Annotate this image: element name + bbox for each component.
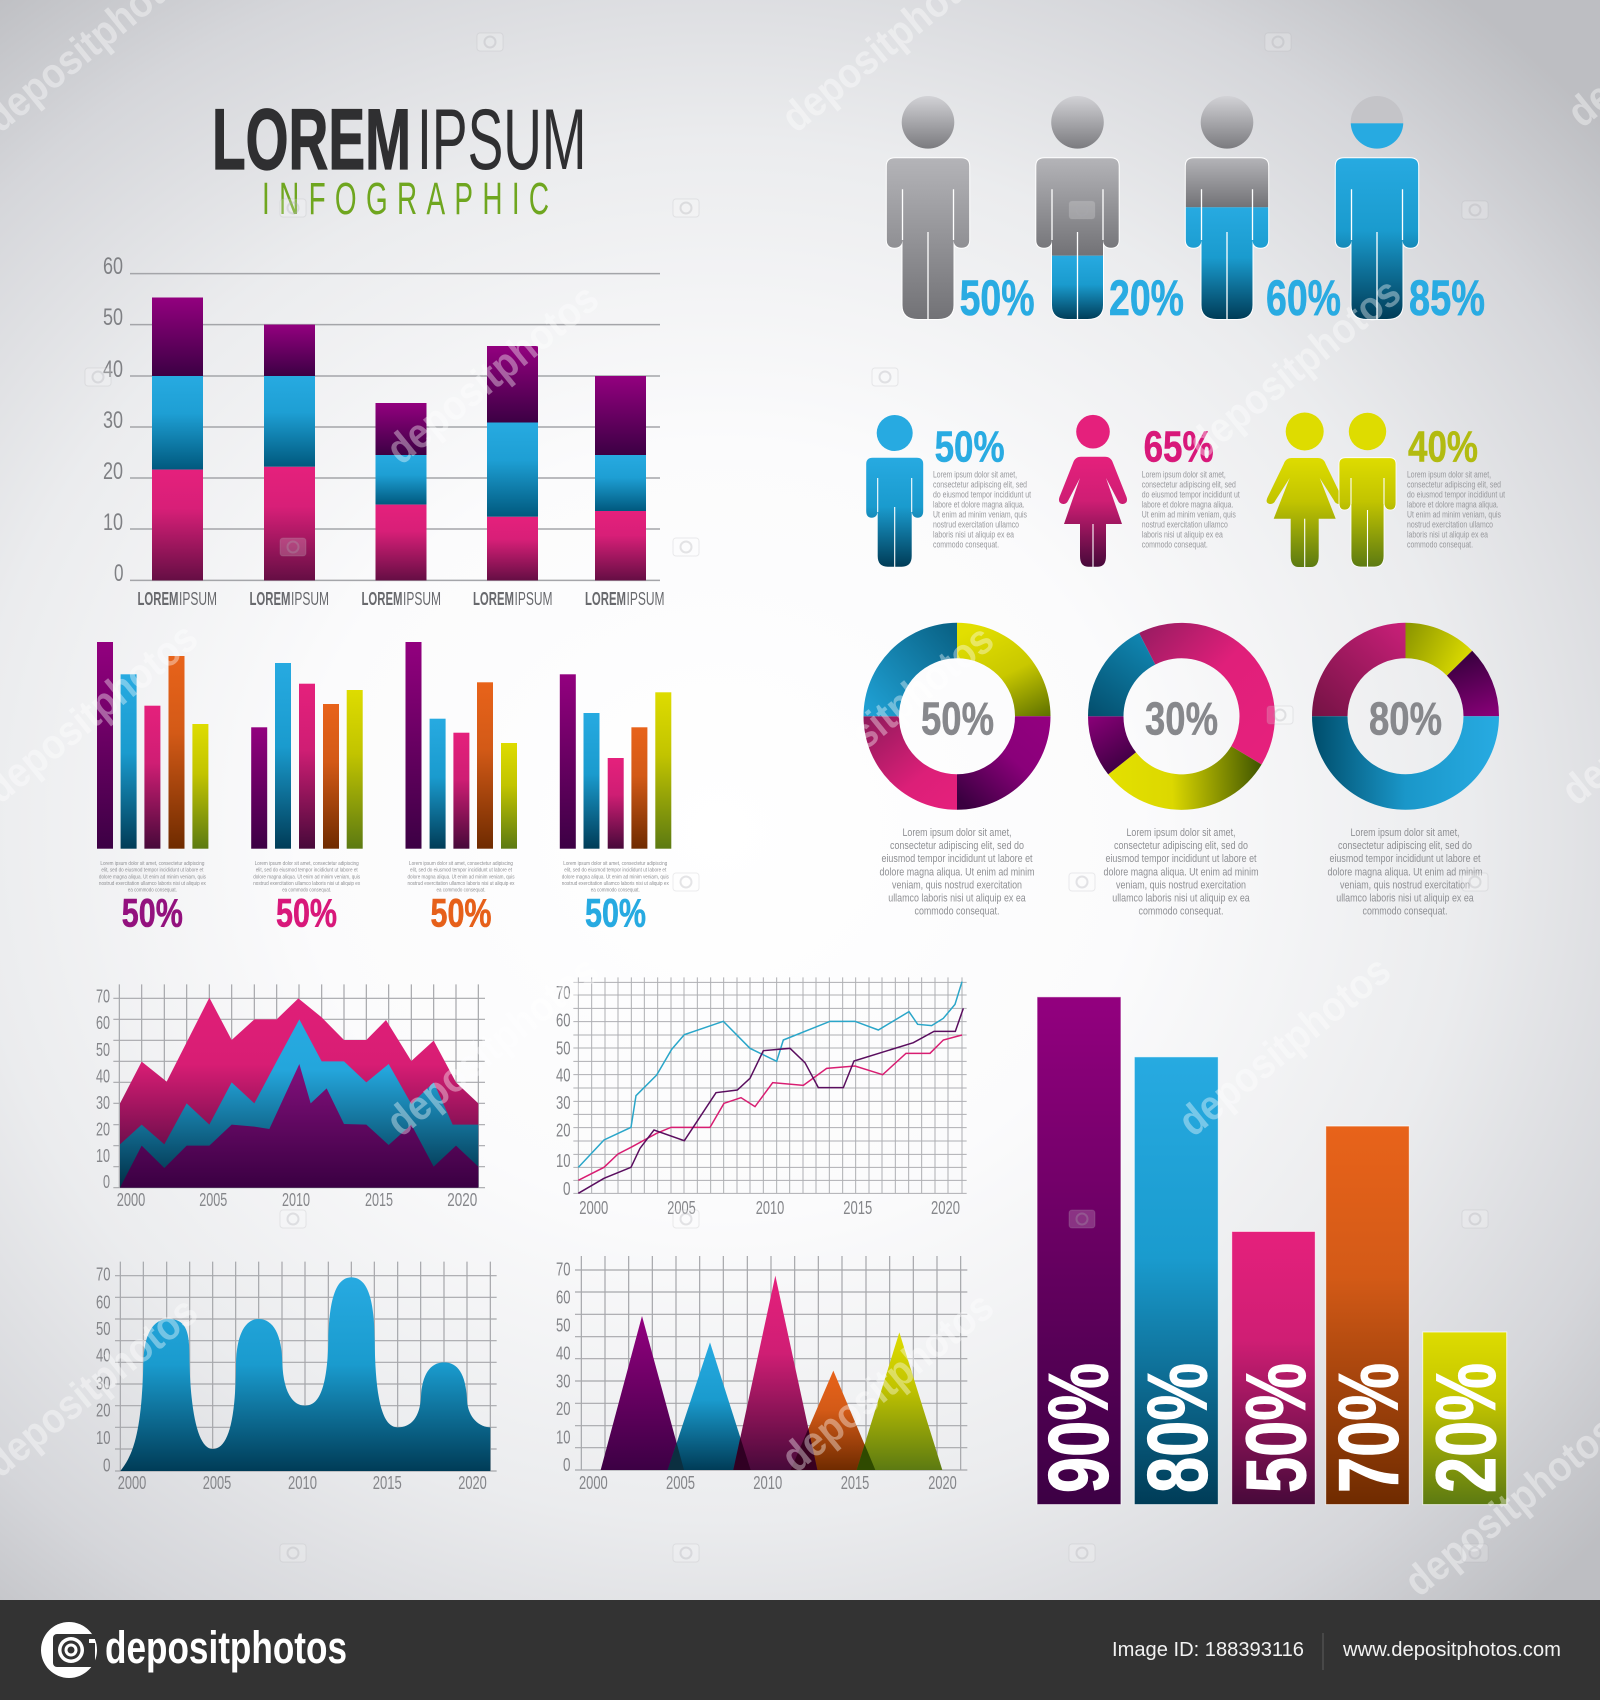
- series: pink: [578, 1035, 962, 1180]
- icon: person 85%: [1332, 96, 1422, 320]
- stacked bar chart: [103, 253, 664, 609]
- percentage: 50%: [430, 892, 492, 936]
- stat: 50%: 50%: [935, 423, 1005, 472]
- bar labels: IPSUM: [514, 589, 552, 609]
- axis labels: 2005: [667, 1198, 696, 1218]
- axis labels: 70: [556, 983, 570, 1003]
- axis labels: 60: [556, 1011, 570, 1031]
- axis labels: 60: [96, 1013, 110, 1033]
- caption: dolore magna aliqua. Ut enim ad minim veniam, quis: [253, 874, 360, 880]
- bar 90%: [1032, 997, 1126, 1505]
- donut caption 3: ullamco laboris nisi ut aliquip ex ea: [1336, 892, 1474, 904]
- percentage: 50%: [122, 892, 183, 936]
- triangle: purple: [601, 1316, 684, 1470]
- triangle overlaps: [668, 1429, 875, 1470]
- donut caption 2: commodo consequat.: [1138, 906, 1224, 918]
- axis labels: [556, 983, 960, 1218]
- caption: [562, 861, 669, 894]
- bar labels: LOREM: [585, 589, 626, 609]
- donut caption 1: ullamco laboris nisi ut aliquip ex ea: [888, 892, 1026, 904]
- axis labels: 40: [96, 1346, 110, 1366]
- donut caption 3: Lorem ipsum dolor sit amet,: [1350, 827, 1460, 839]
- description: laboris nisi ut aliquip ex ea: [1407, 529, 1488, 539]
- axis labels: 2010: [756, 1198, 784, 1218]
- donut caption 3: commodo consequat.: [1362, 906, 1448, 918]
- axis labels: 2000: [117, 1190, 145, 1210]
- bar labels: IPSUM: [403, 589, 441, 609]
- description: Lorem ipsum dolor sit amet,: [1142, 469, 1226, 479]
- layered area chart: [96, 984, 485, 1210]
- caption: [253, 861, 360, 894]
- caption: Lorem ipsum dolor sit amet, consectetur adipiscing: [563, 861, 667, 867]
- bar labels: LOREM: [362, 589, 402, 609]
- axis labels: 2000: [579, 1473, 608, 1493]
- description: Lorem ipsum dolor sit amet,: [1407, 469, 1491, 479]
- donut caption 3: consectetur adipiscing elit, sed do: [1338, 840, 1472, 852]
- icon: couple: [1267, 412, 1396, 567]
- axis labels: 50: [96, 1319, 110, 1339]
- axis labels: 2020: [447, 1190, 477, 1210]
- large percentage bar chart: [1032, 997, 1513, 1505]
- mini bar group 4: [560, 674, 671, 936]
- caption: [99, 861, 206, 894]
- watermark overlay: depositphotos: [377, 946, 607, 1145]
- title: LOREM: [212, 92, 411, 188]
- triangle: yellow: [857, 1332, 942, 1470]
- axis labels: 2005: [199, 1190, 227, 1210]
- stat: 40%: 40%: [1408, 423, 1478, 472]
- axis labels: 2005: [666, 1473, 695, 1493]
- description: commodo consequat.: [1407, 539, 1473, 549]
- smooth area chart: [96, 1262, 497, 1493]
- icon: camera logo: [41, 1622, 97, 1678]
- stat: 65%: 65%: [1144, 423, 1214, 472]
- donut caption 1: eiusmod tempor incididunt ut labore et: [882, 853, 1032, 865]
- axis labels: 2015: [843, 1198, 872, 1218]
- bar labels: IPSUM: [291, 589, 329, 609]
- bar labels: IPSUM: [179, 589, 217, 609]
- description: do eiusmod tempor incididunt ut: [1142, 489, 1240, 499]
- axis labels: 2015: [365, 1190, 393, 1210]
- description: consectetur adipiscing elit, sed: [1407, 479, 1501, 489]
- image id: Image ID: 188393116: [1112, 1639, 1304, 1661]
- stat: 50%: [933, 423, 1031, 549]
- axis labels: 20: [96, 1120, 110, 1140]
- bar 70%: 70%: [1322, 1363, 1416, 1493]
- person percentages: 20%: [1109, 270, 1184, 326]
- axis labels: 2015: [841, 1473, 869, 1493]
- y axis labels: 40: [103, 356, 123, 383]
- donut caption 3: veniam, quis nostrud exercitation: [1340, 879, 1470, 891]
- axis labels: 40: [556, 1066, 570, 1086]
- description: [1142, 469, 1240, 549]
- description: [933, 469, 1031, 549]
- description: nostrud exercitation ullamco: [1142, 519, 1228, 529]
- axis labels: [556, 1260, 957, 1493]
- bar 50%: 50%: [1229, 1363, 1323, 1493]
- icon: person 20%: [1032, 96, 1122, 320]
- donut caption 1: [880, 827, 1034, 918]
- stacked bar 5: [595, 376, 646, 580]
- caption: nostrud exercitation ullamco laboris nisi ut aliquip ex: [99, 881, 206, 887]
- y axis labels: 10: [103, 509, 123, 536]
- person percentages: 85%: [1409, 270, 1485, 326]
- donut caption 2: dolore magna aliqua. Ut enim ad minim: [1104, 866, 1258, 878]
- mini bar group 2: [251, 663, 363, 936]
- donut caption 2: Lorem ipsum dolor sit amet,: [1126, 827, 1236, 839]
- triangle: orange: [791, 1371, 875, 1470]
- caption: elit, sed do eiusmod tempor incididunt ut labore et: [564, 868, 667, 874]
- description: Ut enim ad minim veniam, quis: [933, 509, 1027, 519]
- triangle chart: [556, 1256, 967, 1493]
- icon: person 50%: [883, 96, 973, 320]
- description: commodo consequat.: [933, 539, 999, 549]
- person percentages: 60%: [1266, 270, 1341, 326]
- axis labels: 70: [96, 986, 110, 1006]
- caption: dolore magna aliqua. Ut enim ad minim veniam, quis: [562, 874, 669, 880]
- axis labels: 20: [556, 1399, 570, 1419]
- description: nostrud exercitation ullamco: [933, 519, 1019, 529]
- mini bar group 1: [97, 642, 208, 936]
- brand name: depositphotos: [105, 1622, 347, 1673]
- website: www.depositphotos.com: [1342, 1639, 1561, 1661]
- axis labels: 2015: [373, 1473, 402, 1493]
- axis labels: 2000: [579, 1198, 608, 1218]
- axis labels: 40: [556, 1343, 570, 1363]
- watermark overlay: depositphotos: [772, 615, 1002, 814]
- caption: ea commodo consequat.: [436, 888, 486, 894]
- axis labels: 50: [96, 1040, 110, 1060]
- series: blue: [578, 982, 962, 1167]
- triangle: blue: [668, 1342, 751, 1470]
- series: purple: [578, 1008, 963, 1193]
- axis labels: 2010: [282, 1190, 310, 1210]
- bar 90%: 90%: [1032, 1363, 1126, 1493]
- description: consectetur adipiscing elit, sed: [933, 479, 1027, 489]
- donut chart 50%: [864, 623, 1050, 810]
- mini bar group 3: [406, 642, 517, 936]
- caption: nostrud exercitation ullamco laboris nisi ut aliquip ex: [408, 881, 515, 887]
- y axis labels: 50: [103, 304, 123, 331]
- watermark overlay: depositphotos: [377, 274, 607, 473]
- donut caption 2: ullamco laboris nisi ut aliquip ex ea: [1112, 892, 1250, 904]
- axis labels: 60: [556, 1287, 570, 1307]
- axis labels: 30: [556, 1371, 570, 1391]
- donut chart 30%: [1088, 623, 1275, 810]
- caption: Lorem ipsum dolor sit amet, consectetur adipiscing: [255, 861, 359, 867]
- description: do eiusmod tempor incididunt ut: [1407, 489, 1505, 499]
- caption: elit, sed do eiusmod tempor incididunt ut labore et: [101, 868, 204, 874]
- stat: 40%: [1407, 423, 1505, 549]
- description: consectetur adipiscing elit, sed: [1142, 479, 1236, 489]
- footer banner: [0, 1600, 1600, 1700]
- axis labels: 10: [556, 1427, 570, 1447]
- stacked bar 4: [487, 346, 538, 580]
- donut chart 30%: 30%: [1145, 692, 1218, 744]
- axis labels: 50: [556, 1038, 570, 1058]
- y axis labels: 0: [114, 560, 124, 587]
- person percentages: [960, 270, 1485, 326]
- axis labels: 30: [556, 1093, 570, 1113]
- caption: nostrud exercitation ullamco laboris nisi ut aliquip ex: [562, 881, 669, 887]
- axis labels: 50: [556, 1316, 570, 1336]
- bar labels: IPSUM: [626, 589, 664, 609]
- axis labels: 0: [563, 1179, 570, 1199]
- caption: Lorem ipsum dolor sit amet, consectetur adipiscing: [409, 861, 513, 867]
- description: nostrud exercitation ullamco: [1407, 519, 1493, 529]
- caption: dolore magna aliqua. Ut enim ad minim veniam, quis: [99, 874, 206, 880]
- watermark camera marks: [85, 33, 1488, 1562]
- axis labels: 10: [96, 1428, 110, 1448]
- donut caption 1: dolore magna aliqua. Ut enim ad minim: [880, 866, 1034, 878]
- caption: Lorem ipsum dolor sit amet, consectetur adipiscing: [100, 861, 204, 867]
- caption: elit, sed do eiusmod tempor incididunt ut labore et: [410, 868, 512, 874]
- caption: ea commodo consequat.: [591, 888, 640, 894]
- description: labore et dolore magna aliqua.: [1407, 499, 1498, 509]
- axis labels: 0: [103, 1172, 110, 1192]
- bar labels: [138, 589, 664, 609]
- description: [1407, 469, 1505, 549]
- description: labore et dolore magna aliqua.: [1142, 499, 1233, 509]
- description: laboris nisi ut aliquip ex ea: [933, 529, 1014, 539]
- axis labels: 70: [96, 1265, 110, 1285]
- axis labels: 10: [96, 1146, 110, 1166]
- y axis labels: 30: [103, 407, 123, 434]
- donut caption 3: dolore magna aliqua. Ut enim ad minim: [1328, 866, 1482, 878]
- donut caption 1: commodo consequat.: [914, 906, 1000, 918]
- stat: 65%: [1142, 423, 1240, 549]
- y axis labels: 60: [103, 253, 123, 280]
- watermark overlay: depositphotos: [772, 1282, 1002, 1481]
- percentage: 50%: [276, 892, 337, 936]
- donut chart 50%: 50%: [921, 692, 994, 744]
- donut caption 3: eiusmod tempor incididunt ut labore et: [1330, 853, 1480, 865]
- axis labels: 0: [563, 1455, 570, 1475]
- watermark overlay: depositphotos: [1169, 946, 1399, 1145]
- description: laboris nisi ut aliquip ex ea: [1142, 529, 1223, 539]
- caption: ea commodo consequat.: [128, 888, 177, 894]
- bar labels: LOREM: [138, 589, 178, 609]
- description: Lorem ipsum dolor sit amet,: [933, 469, 1017, 479]
- subtitle: INFOGRAPHIC: [262, 173, 549, 224]
- caption: ea commodo consequat.: [282, 888, 332, 894]
- stacked bar 3: [376, 403, 426, 580]
- axis labels: 30: [96, 1093, 110, 1113]
- axis labels: 20: [556, 1121, 570, 1141]
- title: IPSUM: [417, 92, 586, 188]
- axis labels: 70: [556, 1260, 570, 1280]
- description: do eiusmod tempor incididunt ut: [933, 489, 1031, 499]
- donut caption 1: Lorem ipsum dolor sit amet,: [902, 827, 1012, 839]
- icon: man: [866, 415, 923, 567]
- axis labels: [96, 986, 477, 1210]
- icon: woman: [1059, 415, 1127, 567]
- axis labels: 2020: [928, 1473, 957, 1493]
- description: commodo consequat.: [1142, 539, 1208, 549]
- axis labels: 10: [556, 1151, 570, 1171]
- donut caption 3: [1328, 827, 1482, 918]
- y axis labels: [103, 253, 124, 587]
- bar 50%: [1229, 1231, 1323, 1505]
- stacked bar 1: [152, 298, 203, 580]
- axis labels: 2010: [288, 1473, 317, 1493]
- donut chart 80%: [1312, 623, 1499, 810]
- donut caption 1: veniam, quis nostrud exercitation: [892, 879, 1022, 891]
- axis labels: 2020: [458, 1473, 487, 1493]
- caption: [408, 861, 515, 894]
- caption: elit, sed do eiusmod tempor incididunt ut labore et: [256, 868, 358, 874]
- axis labels: 2020: [931, 1198, 960, 1218]
- bar labels: LOREM: [250, 589, 290, 609]
- axis labels: 60: [96, 1292, 110, 1312]
- line chart: [556, 977, 967, 1218]
- triangle: pink: [733, 1276, 817, 1470]
- axis labels: 0: [103, 1456, 110, 1476]
- caption: nostrud exercitation ullamco laboris nisi ut aliquip ex: [253, 881, 360, 887]
- axis labels: 2005: [203, 1473, 231, 1493]
- percentage: 50%: [585, 892, 646, 936]
- stacked bar 2: [264, 325, 315, 580]
- axis labels: 2010: [753, 1473, 782, 1493]
- person percentages: 50%: [960, 270, 1035, 326]
- caption: dolore magna aliqua. Ut enim ad minim veniam, quis: [408, 874, 515, 880]
- axis labels: 20: [96, 1401, 110, 1421]
- bar 80%: 80%: [1131, 1363, 1225, 1493]
- donut caption 2: eiusmod tempor incididunt ut labore et: [1106, 853, 1256, 865]
- icon: person 60%: [1182, 96, 1272, 319]
- watermark overlay: depositphotos: [1179, 268, 1409, 467]
- donut chart 80%: 80%: [1369, 692, 1442, 744]
- axis labels: [96, 1265, 487, 1493]
- description: Ut enim ad minim veniam, quis: [1407, 509, 1501, 519]
- bar 70%: [1322, 1126, 1416, 1505]
- donut caption 2: veniam, quis nostrud exercitation: [1116, 879, 1246, 891]
- axis labels: 30: [96, 1373, 110, 1393]
- donut caption 2: [1104, 827, 1258, 918]
- bar labels: LOREM: [473, 589, 514, 609]
- axis labels: 2000: [118, 1473, 146, 1493]
- donut caption 1: consectetur adipiscing elit, sed do: [890, 840, 1024, 852]
- y axis labels: 20: [103, 458, 123, 485]
- bar 20%: 20%: [1419, 1363, 1513, 1493]
- axis labels: 40: [96, 1067, 110, 1087]
- bar 80%: [1131, 1057, 1225, 1505]
- description: labore et dolore magna aliqua.: [933, 499, 1024, 509]
- donut caption 2: consectetur adipiscing elit, sed do: [1114, 840, 1248, 852]
- description: Ut enim ad minim veniam, quis: [1142, 509, 1236, 519]
